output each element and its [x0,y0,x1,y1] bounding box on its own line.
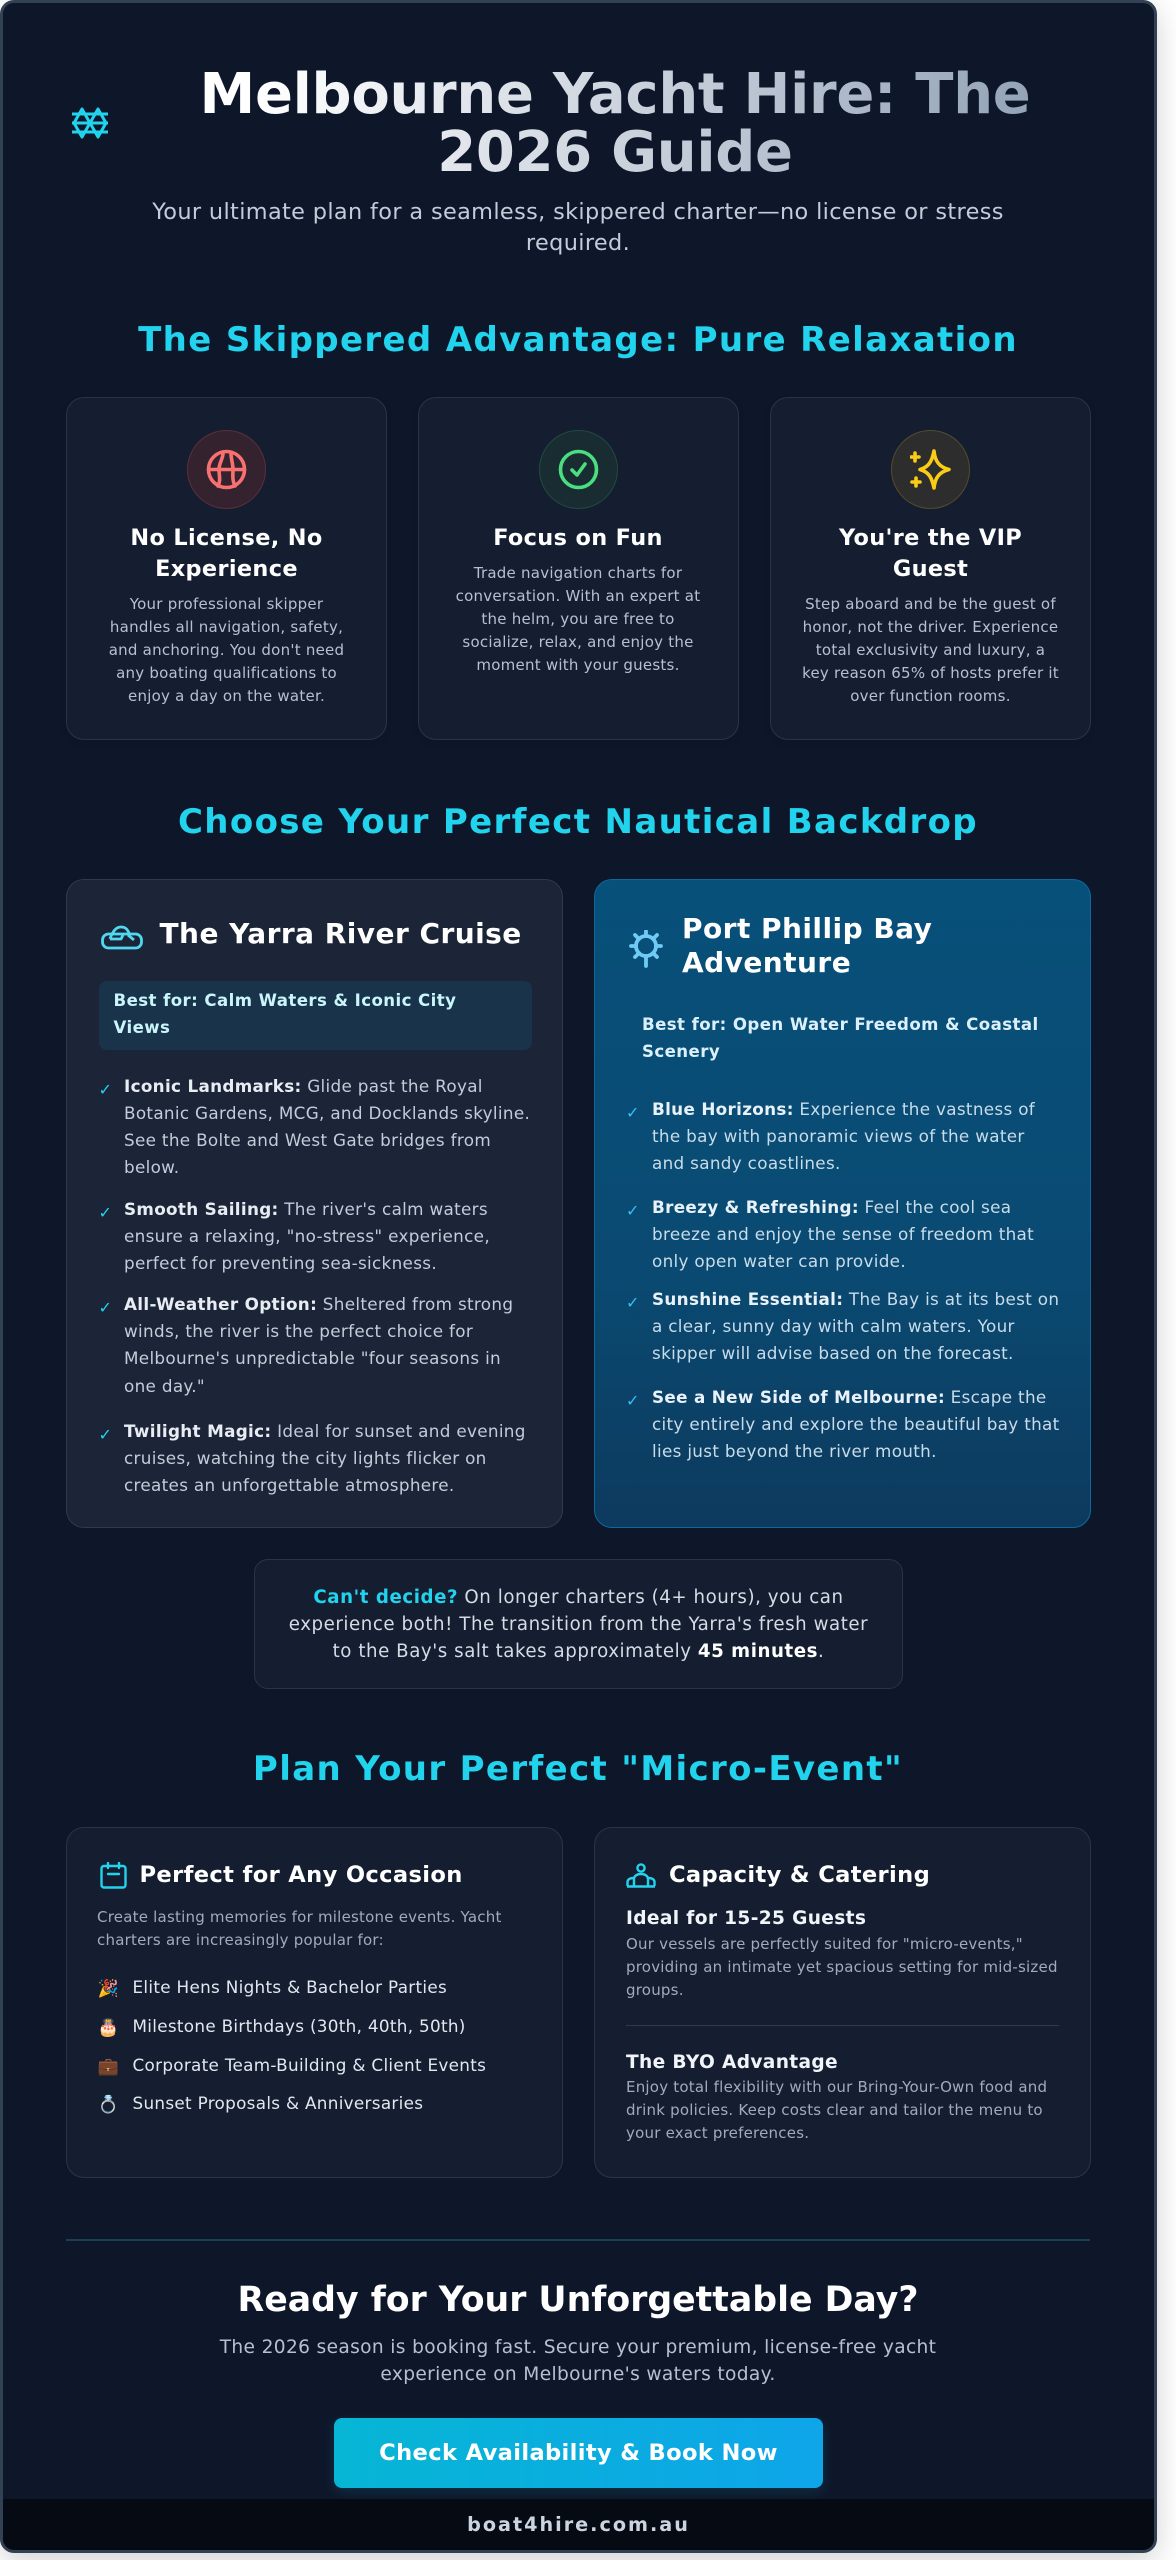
description: Our vessels are perfectly suited for "micro-events," [626,1935,1023,1953]
item: sunshine: a clear, sunny day with calm waters. Your [652,1316,1015,1336]
panel title: The Yarra River Cruise [160,917,522,950]
item: blue horizons [626,1098,1035,1173]
item: all-weather: winds, the river is the perfect choice for [124,1321,473,1341]
panel title: Adventure [682,946,851,979]
item: new side [626,1386,1060,1461]
item: iconic landmarks [98,1076,530,1177]
card text: total exclusivity and luxury, a [816,641,1045,659]
card text: Trade navigation charts for [474,564,682,582]
item: smooth sailing: perfect for preventing sea-sickness. [124,1253,437,1273]
panel title: Port Phillip Bay [682,912,932,945]
header [72,62,1030,256]
cta heading: Ready for Your Unforgettable Day? [238,2280,918,2320]
occasion: birthdays: Milestone Birthdays (30th, 40th, 50th) [132,2016,466,2036]
item: all-weather: one day." [124,1376,205,1396]
item: iconic landmarks: See the Bolte and West Gate bridges from [124,1130,491,1150]
best for badge: Best for: Open Water Freedom & Coastal [642,1014,1039,1034]
intro text: charters are increasingly popular for: [97,1931,384,1949]
card text: any boating qualifications to [116,664,337,682]
callout: Can't decide? On longer charters (4+ hours), you can [313,1587,844,1608]
panel: no license [66,397,387,740]
cta text [220,2337,936,2385]
heading: micro-event: Plan Your Perfect "Micro-Event" [253,1749,903,1789]
text block: byo [626,2052,1047,2142]
item: all-weather: Melbourne's unpredictable "four seasons in [124,1348,501,1368]
item: all-weather: All-Weather Option: Sheltered from strong [124,1294,513,1314]
item: breezy [626,1196,1034,1271]
card title: No License, No [130,525,323,551]
footer [0,2499,1157,2553]
item: breezy: ✓ [626,1200,639,1220]
callout: experience both! The transition from the Yarra's fresh water [289,1614,868,1635]
panel: capacity and catering [594,1827,1091,2178]
occasion: birthdays: 🎂 [98,2018,119,2038]
panel: port phillip bay [594,879,1091,1528]
subtitle: Your ultimate plan for a seamless, skippered charter—no license or stress [152,199,1004,225]
card text: key reason 65% of hosts prefer it [802,664,1059,682]
icon: yellow sparkles [891,430,970,509]
subtitle: required. [526,230,630,256]
item: breezy: only open water can provide. [652,1251,906,1271]
item: sunshine: Sunshine Essential: The Bay is at its best on [652,1288,1059,1308]
card text [456,564,700,674]
feature list [626,1098,1060,1461]
card text [109,595,344,705]
panel: focus on fun [418,397,738,740]
description [626,1935,1058,1999]
card title: Guest [893,556,968,582]
section title: Perfect for Any Occasion [140,1862,463,1888]
item: iconic landmarks: below. [124,1157,179,1177]
icon: people [626,1863,656,1888]
item: twilight magic: creates an unforgettable atmosphere. [124,1475,455,1495]
callout: to the Bay's salt takes approximately 45 minutes. [333,1641,824,1662]
description: your exact preferences. [626,2124,809,2142]
occasion: corporate: 💼 [98,2056,119,2076]
occasion: corporate: Corporate Team-Building & Client Events [132,2054,486,2074]
feature list [98,1076,530,1495]
card text: handles all navigation, safety, [110,618,343,636]
card title: You're the VIP [839,525,1022,551]
item: blue horizons: the bay with panoramic views of the water [652,1126,1025,1146]
item: smooth sailing: Smooth Sailing: The river's calm waters [124,1199,488,1219]
panel title [682,912,932,979]
heading: nautical backdrop: Choose Your Perfect Nautical Backdrop [178,802,978,842]
card text [802,595,1059,705]
button [334,2418,823,2488]
description: drink policies. Keep costs clear and tailor the menu to [626,2101,1043,2119]
icon: ship wheel grid [72,107,108,139]
item: new side: lies just beyond the river mouth. [652,1441,937,1461]
card title [838,525,1022,582]
card text: socialize, relax, and enjoy the [462,633,694,651]
item: smooth sailing: ensure a relaxing, "no-stress" experience, [124,1226,490,1246]
title [110,66,1120,181]
best for badge: Views [114,1018,170,1037]
card text: the helm, you are free to [481,610,675,628]
subtitle [152,199,1004,256]
item: sunshine: ✓ [626,1292,639,1312]
item: sunshine: skipper will advise based on the forecast. [652,1343,1014,1363]
item: twilight magic: cruises, watching the city lights flicker on [124,1448,487,1468]
card text: enjoy a day on the water. [128,687,325,705]
best for badge: Scenery [642,1042,720,1061]
best for badge [98,981,532,1050]
item: twilight magic: ✓ [98,1424,112,1444]
title: Melbourne Yacht Hire: The [200,62,1030,127]
icon: calendar [100,1862,127,1889]
item: iconic landmarks: Botanic Gardens, MCG, and Docklands skyline. [124,1103,530,1123]
description: Enjoy total flexibility with our Bring-Your-Own food and [626,2078,1047,2096]
item: new side: ✓ [626,1390,639,1410]
subheading: The BYO Advantage [626,2052,838,2073]
card text: conversation. With an expert at [456,587,700,605]
description [626,2078,1047,2142]
icon: boat [101,926,143,950]
item: new side: city entirely and explore the beautiful bay that [652,1414,1060,1434]
item: twilight magic [98,1420,526,1495]
footer: boat4hire.com.au [467,2513,690,2536]
card text: and anchoring. You don't need [109,641,344,659]
best for badge: Best for: Calm Waters & Iconic City [114,991,456,1010]
icon: green check circle [538,430,618,509]
icon: red helm circle [187,430,266,509]
item: blue horizons: and sandy coastlines. [652,1153,841,1173]
card title: Focus on Fun [493,525,663,551]
item: blue horizons: Blue Horizons: Experience the vastness of [652,1098,1035,1118]
cta text: The 2026 season is booking fast. Secure your premium, license-free yacht [220,2337,936,2358]
item: all-weather [98,1294,513,1396]
title: 2026 Guide [437,120,793,184]
section title: Capacity & Catering [669,1862,930,1888]
panel: perfect for any occasion [66,1827,562,2178]
card text: honor, not the driver. Experience [803,618,1058,636]
item: sunshine [626,1288,1059,1363]
card text: Your professional skipper [130,595,323,613]
occasion: proposals: 💍 [98,2095,119,2115]
item: breezy: Breezy & Refreshing: Feel the cool sea [652,1196,1011,1216]
panel: yarra river cruise [66,879,562,1528]
item: new side: See a New Side of Melbourne: Escape the [652,1386,1047,1406]
occasion: hens nights: Elite Hens Nights & Bachelor Parties [132,1977,447,1997]
description: providing an intimate yet spacious setting for mid-sized [626,1958,1058,1976]
item: breezy: breeze and enjoy the sense of freedom that [652,1224,1034,1244]
call to action [220,2280,936,2494]
description: groups. [626,1981,684,1999]
card text: over function rooms. [850,687,1011,705]
subheading: Ideal for 15-25 Guests [626,1908,866,1929]
item: smooth sailing: ✓ [98,1203,112,1222]
icon: sun [629,930,663,968]
item: iconic landmarks: Iconic Landmarks: Glide past the Royal [124,1076,483,1096]
callout [254,1559,903,1689]
occasion: hens nights: 🎉 [98,1979,119,1999]
button: Check Availability & Book Now [379,2440,778,2466]
cta text: experience on Melbourne's waters today. [380,2364,776,2385]
card text: moment with your guests. [476,656,680,674]
card text: Step aboard and be the guest of [805,595,1056,613]
card title [130,525,323,582]
card title: Experience [155,556,298,582]
item: twilight magic: Twilight Magic: Ideal for sunset and evening [124,1420,526,1440]
item: blue horizons: ✓ [626,1102,639,1122]
intro text [97,1908,502,1949]
panel: vip guest [770,397,1091,740]
item: all-weather: ✓ [98,1298,112,1317]
text block: ideal guests [626,1908,1058,1999]
occasion: proposals: Sunset Proposals & Anniversaries [132,2093,423,2113]
item: iconic landmarks: ✓ [98,1080,112,1098]
item: smooth sailing [98,1199,490,1273]
intro text: Create lasting memories for milestone events. Yacht [97,1908,502,1926]
best for badge [627,1004,1060,1074]
heading: skippered advantage: The Skippered Advantage: Pure Relaxation [138,320,1018,360]
